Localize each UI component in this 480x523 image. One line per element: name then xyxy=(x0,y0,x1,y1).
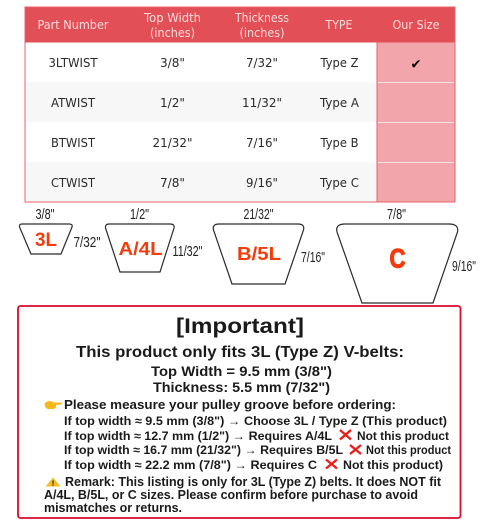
row: ATWIST: 11/32" xyxy=(242,95,282,110)
belt profile: A/4L: A/4L xyxy=(118,238,162,259)
icon: red cross xyxy=(350,445,361,454)
row: BTWIST: BTWIST xyxy=(51,135,95,150)
remark text xyxy=(44,475,442,515)
belt profile: B/5L xyxy=(213,207,325,284)
icon: red cross xyxy=(326,460,337,468)
table header: Thickness xyxy=(234,10,289,25)
row: ATWIST: ATWIST xyxy=(51,95,95,110)
table header: (inches) xyxy=(150,25,195,40)
sizing line: 3L: If top width ≈ 9.5 mm (3/8") → Choose 3L / Type Z (This product) xyxy=(64,414,447,428)
sizing line: A/4L: If top width ≈ 12.7 mm (1/2") → Requires A/4L xyxy=(64,429,332,443)
row: ATWIST: 1/2" xyxy=(160,95,185,110)
row: BTWIST: Type B xyxy=(320,135,358,150)
row: ATWIST: Type A xyxy=(319,95,359,110)
belt profile: A/4L: 1/2" xyxy=(130,207,149,223)
sizing line: A/4L xyxy=(64,429,449,443)
row: 3LTWIST: 3LTWIST xyxy=(48,55,98,70)
table row backgrounds xyxy=(25,42,377,202)
table header: Our Size xyxy=(392,17,440,32)
row: CTWIST: CTWIST xyxy=(51,175,95,190)
remark text: A/4L, B/5L, or C sizes. Please confirm before purchase to avoid xyxy=(44,488,418,502)
sizing line: C: Not this product) xyxy=(343,458,443,472)
top width spec: Top Width = 9.5 mm (3/8") xyxy=(151,364,332,379)
belt profile: B/5L: 7/16" xyxy=(301,250,325,266)
row: BTWIST: 21/32" xyxy=(152,135,192,150)
row: CTWIST: Type C xyxy=(319,175,359,190)
table header: TYPE xyxy=(325,17,353,32)
belt profile: 3L: 3L xyxy=(35,230,57,251)
remark text: mismatches or returns. xyxy=(44,501,182,515)
row: CTWIST: 9/16" xyxy=(246,175,278,190)
our size column xyxy=(377,42,455,202)
row: BTWIST: 7/16" xyxy=(246,135,278,150)
row: 3LTWIST: Type Z xyxy=(320,55,358,70)
sizing line: C xyxy=(64,458,443,472)
row: ATWIST xyxy=(51,95,359,110)
row: 3LTWIST: 7/32" xyxy=(246,55,278,70)
table border xyxy=(25,7,455,202)
icon: pointing hand xyxy=(44,401,62,409)
belt profile: A/4L xyxy=(105,207,202,272)
belt profile: 3L: 7/32" xyxy=(74,235,100,251)
belt profile: C: 7/8" xyxy=(387,207,406,223)
belt profile: A/4L: 11/32" xyxy=(172,244,202,260)
icon: red cross xyxy=(340,430,351,440)
belt profile: C: C xyxy=(390,244,406,274)
icon: warning triangle xyxy=(46,478,60,486)
notice title: [Important] xyxy=(176,315,304,338)
remark text: Remark: This listing is only for 3L (Type Z) belts. It does NOT fit xyxy=(65,475,442,489)
size table xyxy=(25,7,455,202)
thickness spec: Thickness: 5.5 mm (7/32") xyxy=(153,380,330,395)
belt profile: 3L: 3/8" xyxy=(36,207,54,223)
sizing line: A/4L: Not this product xyxy=(357,429,449,443)
fit statement: This product only fits 3L (Type Z) V-belts: xyxy=(76,344,404,361)
important notice panel xyxy=(18,306,460,518)
row: BTWIST xyxy=(51,135,358,150)
table header: Top Width xyxy=(143,10,201,25)
sizing line: C: If top width ≈ 22.2 mm (7/8") → Requires C xyxy=(64,458,317,472)
row: 3LTWIST xyxy=(48,55,421,72)
table header xyxy=(25,7,455,42)
sizing line: B/5L: Not this product xyxy=(366,445,451,457)
belt profile: B/5L: B/5L xyxy=(237,243,281,264)
belt profile: B/5L: 21/32" xyxy=(244,207,274,223)
belt profile: 3L xyxy=(19,207,100,254)
row: CTWIST: 7/8" xyxy=(160,175,185,190)
table header: (inches) xyxy=(240,25,284,40)
row: 3LTWIST: 3/8" xyxy=(160,55,185,70)
check mark: ✔ xyxy=(411,58,421,72)
row: CTWIST xyxy=(51,175,359,190)
measure instruction: Please measure your pulley groove before ordering: xyxy=(64,397,396,412)
belt profile: C xyxy=(337,207,476,303)
table header: Part Number xyxy=(38,17,109,32)
sizing line: B/5L: If top width ≈ 16.7 mm (21/32") → Requires B/5L xyxy=(64,443,343,457)
